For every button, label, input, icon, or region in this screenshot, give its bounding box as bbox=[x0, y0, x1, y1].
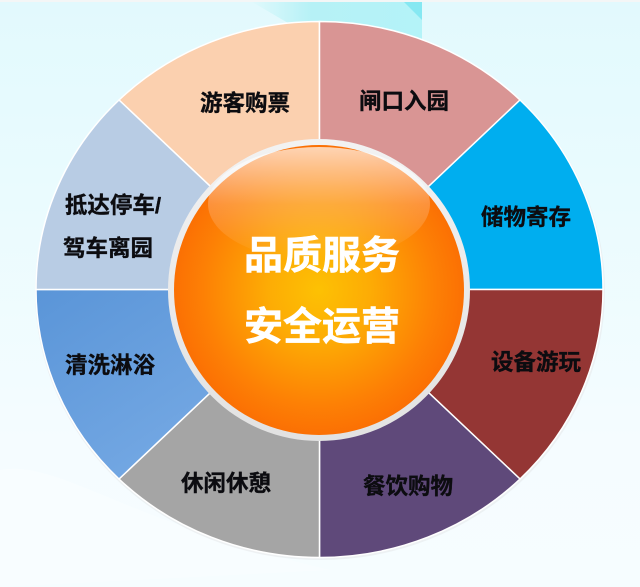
heading: 安全运营: 安全运营 bbox=[244, 306, 400, 349]
label: 闸口入园: 闸口入园 bbox=[359, 89, 449, 114]
label: 休闲休憩: 休闲休憩 bbox=[181, 471, 271, 496]
label: 餐饮购物: 餐饮购物 bbox=[363, 474, 453, 499]
label: 抵达停车/驾车离园: 抵达停车/ bbox=[65, 193, 162, 218]
heading: 品质服务: 品质服务 bbox=[244, 235, 400, 278]
center orb bbox=[168, 139, 470, 441]
label: 设备游玩: 设备游玩 bbox=[491, 350, 581, 375]
gloss highlight bbox=[208, 147, 430, 261]
segment: 游客购票 bbox=[119, 21, 320, 289]
label: 清洗淋浴: 清洗淋浴 bbox=[65, 353, 155, 378]
label: 抵达停车/驾车离园 bbox=[63, 193, 162, 261]
segment: 抵达停车 bbox=[36, 100, 319, 290]
segment: 储物寄存 bbox=[320, 100, 603, 290]
label: 储物寄存: 储物寄存 bbox=[481, 205, 571, 230]
segment: 清洗淋浴 bbox=[36, 290, 320, 479]
label: 游客购票: 游客购票 bbox=[200, 90, 290, 116]
segment: 餐饮购物 bbox=[320, 290, 520, 558]
segment: 闸口入园 bbox=[320, 22, 520, 290]
label: 抵达停车/驾车离园: 驾车离园 bbox=[63, 235, 153, 261]
segment: 设备游玩 bbox=[320, 290, 603, 479]
segment: 休闲休憩 bbox=[119, 290, 320, 558]
